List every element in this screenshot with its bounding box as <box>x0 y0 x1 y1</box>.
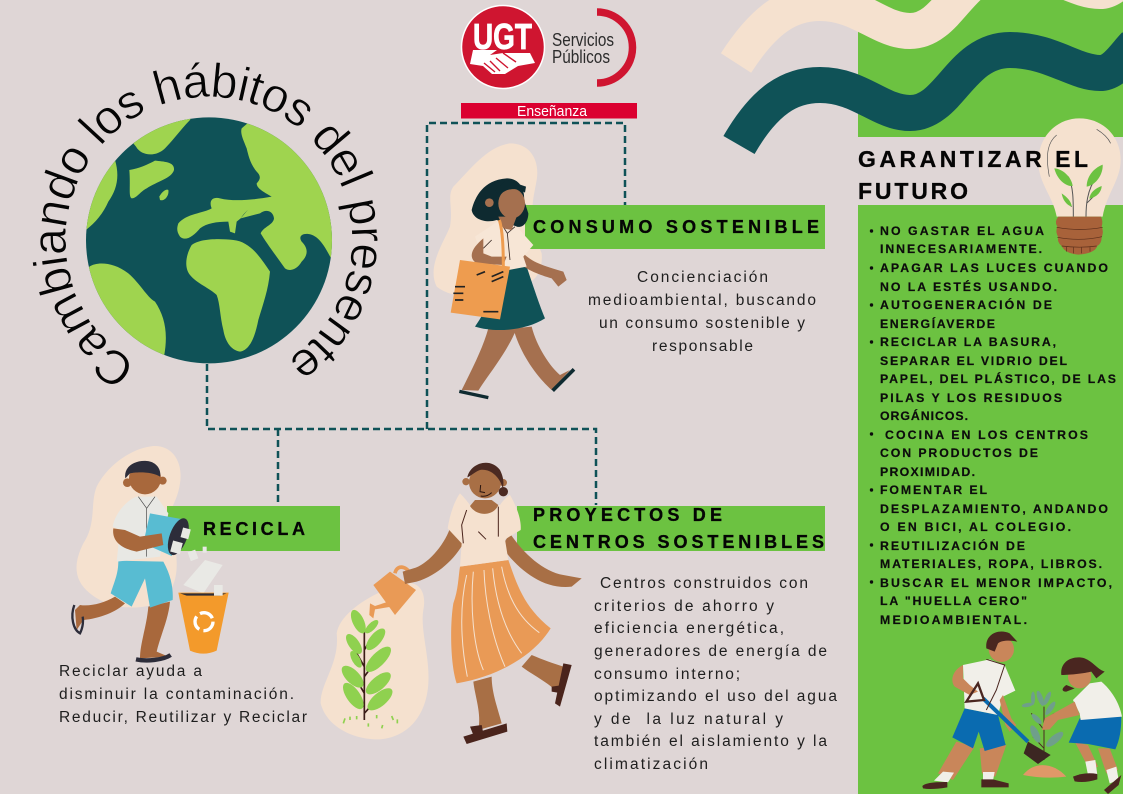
text: recicla description: Reducir, Reutilizar y Reciclar <box>59 709 307 726</box>
text: consumo description: medioambiental, buscando <box>588 292 816 309</box>
dashed connector lines <box>207 123 625 505</box>
panel: right column list background <box>858 205 1123 794</box>
label bar: Enseñanza: Enseñanza <box>517 103 588 120</box>
illustration: man recycling <box>72 461 229 660</box>
heading: garantizar el futuro <box>858 146 1088 204</box>
text: proyectos description: climatización <box>594 756 708 773</box>
heading: proyectos de centros sostenibles <box>533 505 824 552</box>
list: garantizar el futuro actions: ORGÁNICOS. <box>880 408 968 423</box>
list: garantizar el futuro actions <box>870 224 1116 627</box>
list: garantizar el futuro actions: NO GASTAR EL AGUA <box>880 224 1044 238</box>
list: garantizar el futuro actions: LA "HUELLA CERO" <box>880 594 1027 608</box>
list: garantizar el futuro actions: COCINA EN LOS CENTROS <box>885 428 1088 442</box>
list: garantizar el futuro actions: DESPLAZAMIENTO, ANDANDO <box>880 502 1108 516</box>
text: proyectos description: eficiencia energética, <box>594 620 784 637</box>
illustration: woman watering plant <box>321 463 582 744</box>
decorative wave: teal <box>739 45 1123 145</box>
list: garantizar el futuro actions: PAPEL, DEL PLÁSTICO, DE LAS <box>880 371 1116 386</box>
text: proyectos description: y de la luz natural y <box>594 711 783 728</box>
logo: UGT Servicios Públicos <box>462 6 632 88</box>
heading: recicla: RECICLA <box>203 519 305 539</box>
list: garantizar el futuro actions: APAGAR LAS LUCES CUANDO <box>880 261 1108 275</box>
text: recicla description: Reciclar ayuda a <box>59 663 202 680</box>
text: consumo description: Concienciación <box>637 269 768 286</box>
background blob: woman with bag <box>434 143 542 297</box>
text: proyectos description: optimizando el uso del agua <box>594 688 837 705</box>
title: curved heading: Cambiando los hábitos del presente <box>32 62 378 384</box>
list: garantizar el futuro actions: ENERGÍAVERDE <box>880 316 995 331</box>
logo: UGT Servicios Públicos: UGT <box>473 16 532 57</box>
list: garantizar el futuro actions: BUSCAR EL MENOR IMPACTO, <box>880 576 1112 590</box>
panel: recicla heading bar <box>167 506 340 551</box>
illustration: woman with bag <box>451 178 574 398</box>
text: proyectos description: consumo interno; <box>594 666 740 683</box>
background blob: man recycling <box>77 446 181 607</box>
illustration: children planting a tree <box>922 631 1122 794</box>
heading: proyectos de centros sostenibles: PROYECTOS DE <box>533 505 722 525</box>
text: consumo description: un consumo sostenible y <box>599 315 805 332</box>
list: garantizar el futuro actions: MEDIOAMBIENTAL. <box>880 613 1027 627</box>
heading: consumo sostenible: CONSUMO SOSTENIBLE <box>533 217 819 237</box>
heading: garantizar el futuro: FUTURO <box>858 178 968 204</box>
panel: right column top green block <box>858 0 1123 137</box>
illustration: light bulb with plant <box>1038 118 1121 255</box>
list: garantizar el futuro actions: AUTOGENERACIÓN DE <box>880 297 1052 312</box>
list: garantizar el futuro actions: O EN BICI, AL COLEGIO. <box>880 520 1071 534</box>
list: garantizar el futuro actions: PROXIMIDAD. <box>880 465 975 479</box>
text: proyectos description <box>594 575 837 773</box>
list: garantizar el futuro actions: REUTILIZACIÓN DE <box>880 538 1025 553</box>
label bar: Enseñanza <box>461 103 637 120</box>
text: consumo description: responsable <box>652 338 753 355</box>
list: garantizar el futuro actions: RECICLAR LA BASURA, <box>880 335 1056 349</box>
text: proyectos description: también el aislamiento y la <box>594 733 827 750</box>
decorative wave: cream <box>736 0 1123 63</box>
logo: UGT Servicios Públicos: Públicos <box>552 46 610 67</box>
text: proyectos description: generadores de energía de <box>594 643 827 660</box>
list: garantizar el futuro actions: SEPARAR EL VIDRIO DEL <box>880 354 1067 368</box>
text: proyectos description: Centros construidos con <box>600 575 808 592</box>
icon: globe <box>77 113 340 367</box>
list: garantizar el futuro actions: INNECESARIAMENTE. <box>880 242 1042 256</box>
text: proyectos description: criterios de ahorro y <box>594 598 774 615</box>
list: garantizar el futuro actions: NO LA ESTÉS USANDO. <box>880 279 1057 294</box>
heading: proyectos de centros sostenibles: CENTROS SOSTENIBLES <box>533 532 824 552</box>
text: consumo description <box>588 269 816 355</box>
panel: consumo sostenible heading bar <box>525 205 825 249</box>
panel: proyectos heading bar <box>517 506 825 551</box>
logo: UGT Servicios Públicos: Servicios <box>552 29 614 50</box>
list: garantizar el futuro actions: PILAS Y LOS RESIDUOS <box>880 391 1062 405</box>
text: recicla description <box>59 663 307 726</box>
text: recicla description: disminuir la contaminación. <box>59 686 294 703</box>
heading: garantizar el futuro: GARANTIZAR EL <box>858 146 1088 172</box>
list: garantizar el futuro actions: CON PRODUCTOS DE <box>880 446 1038 460</box>
list: garantizar el futuro actions: FOMENTAR EL <box>880 483 987 497</box>
list: garantizar el futuro actions: MATERIALES, ROPA, LIBROS. <box>880 557 1102 571</box>
